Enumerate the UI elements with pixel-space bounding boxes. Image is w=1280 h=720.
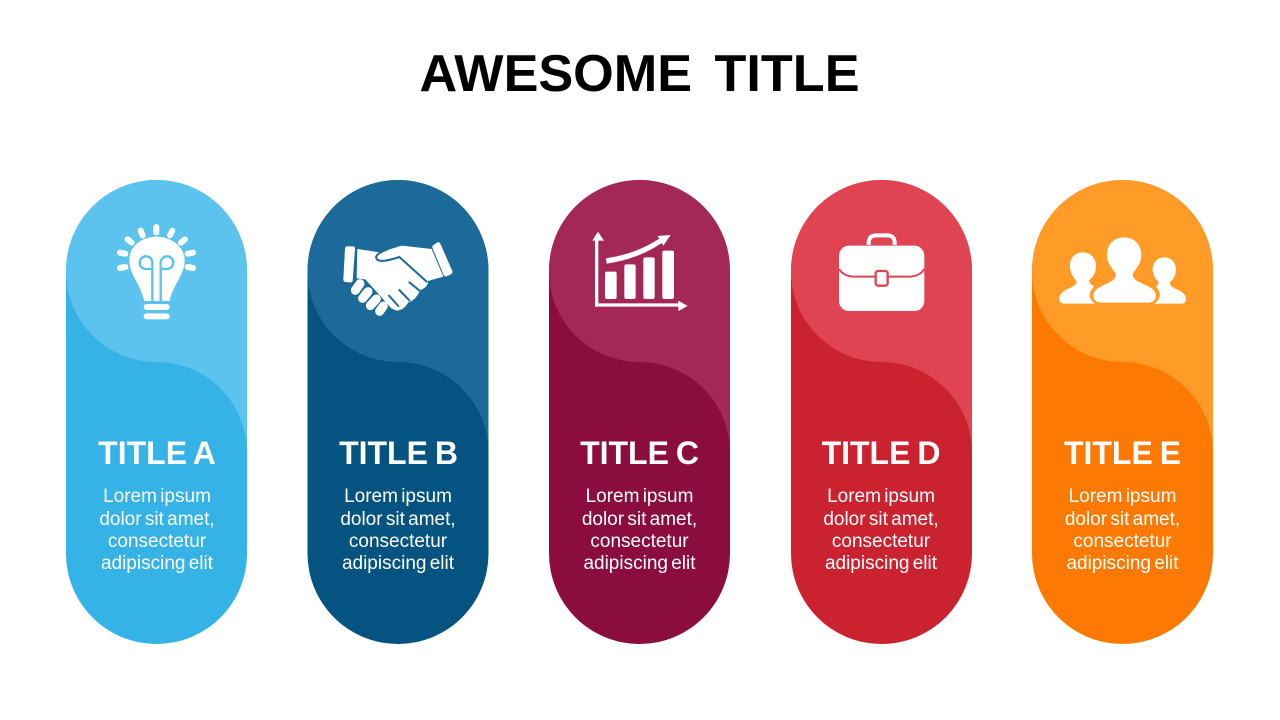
title: AWESOME TITLE <box>420 45 860 103</box>
text block B: dolor sit amet, <box>340 509 456 530</box>
light wave E <box>1032 180 1213 453</box>
text block E: consectetur <box>1073 531 1172 552</box>
icon: light bulb <box>120 227 193 316</box>
icon: people <box>1059 237 1186 304</box>
text block E: adipiscing elit <box>1066 553 1179 574</box>
text block B: adipiscing elit <box>342 553 455 574</box>
heading B: TITLE B <box>339 435 458 471</box>
light wave D <box>791 180 972 453</box>
text block C: dolor sit amet, <box>582 509 697 530</box>
text block A: adipiscing elit <box>101 553 214 574</box>
light wave C <box>549 180 730 453</box>
pill background A <box>66 180 247 644</box>
text block D: adipiscing elit <box>825 553 938 574</box>
text block A: consectetur <box>108 531 207 552</box>
pill background D <box>791 180 972 644</box>
text block B: consectetur <box>349 531 448 552</box>
text block D: Lorem ipsum <box>827 486 935 507</box>
light wave A <box>66 180 247 453</box>
text block C: consectetur <box>590 531 689 552</box>
text block C: adipiscing elit <box>583 553 696 574</box>
panel: Title D <box>791 180 972 644</box>
panel: Title E <box>1032 180 1213 644</box>
text block E: Lorem ipsum <box>1069 486 1176 507</box>
text block B: Lorem ipsum <box>344 486 452 507</box>
heading A: TITLE A <box>98 435 216 471</box>
icon: growth chart <box>592 232 688 311</box>
text block E: dolor sit amet, <box>1065 509 1180 530</box>
pill background E <box>1032 180 1213 644</box>
heading E: TITLE E <box>1064 435 1181 471</box>
text block A: dolor sit amet, <box>99 509 215 530</box>
text block D: dolor sit amet, <box>823 509 939 530</box>
icon: handshake <box>343 242 452 311</box>
icon: briefcase <box>839 235 924 311</box>
light wave B <box>307 180 488 453</box>
pill background C <box>549 180 730 644</box>
panel: Title A <box>66 180 247 644</box>
heading D: TITLE D <box>822 435 940 471</box>
text block C: Lorem ipsum <box>586 486 693 507</box>
panel: Title B <box>307 180 488 644</box>
heading C: TITLE C <box>580 435 699 471</box>
pill background B <box>308 180 488 644</box>
panel: Title C <box>549 180 730 644</box>
text block A: Lorem ipsum <box>103 486 211 507</box>
text block D: consectetur <box>832 531 931 552</box>
